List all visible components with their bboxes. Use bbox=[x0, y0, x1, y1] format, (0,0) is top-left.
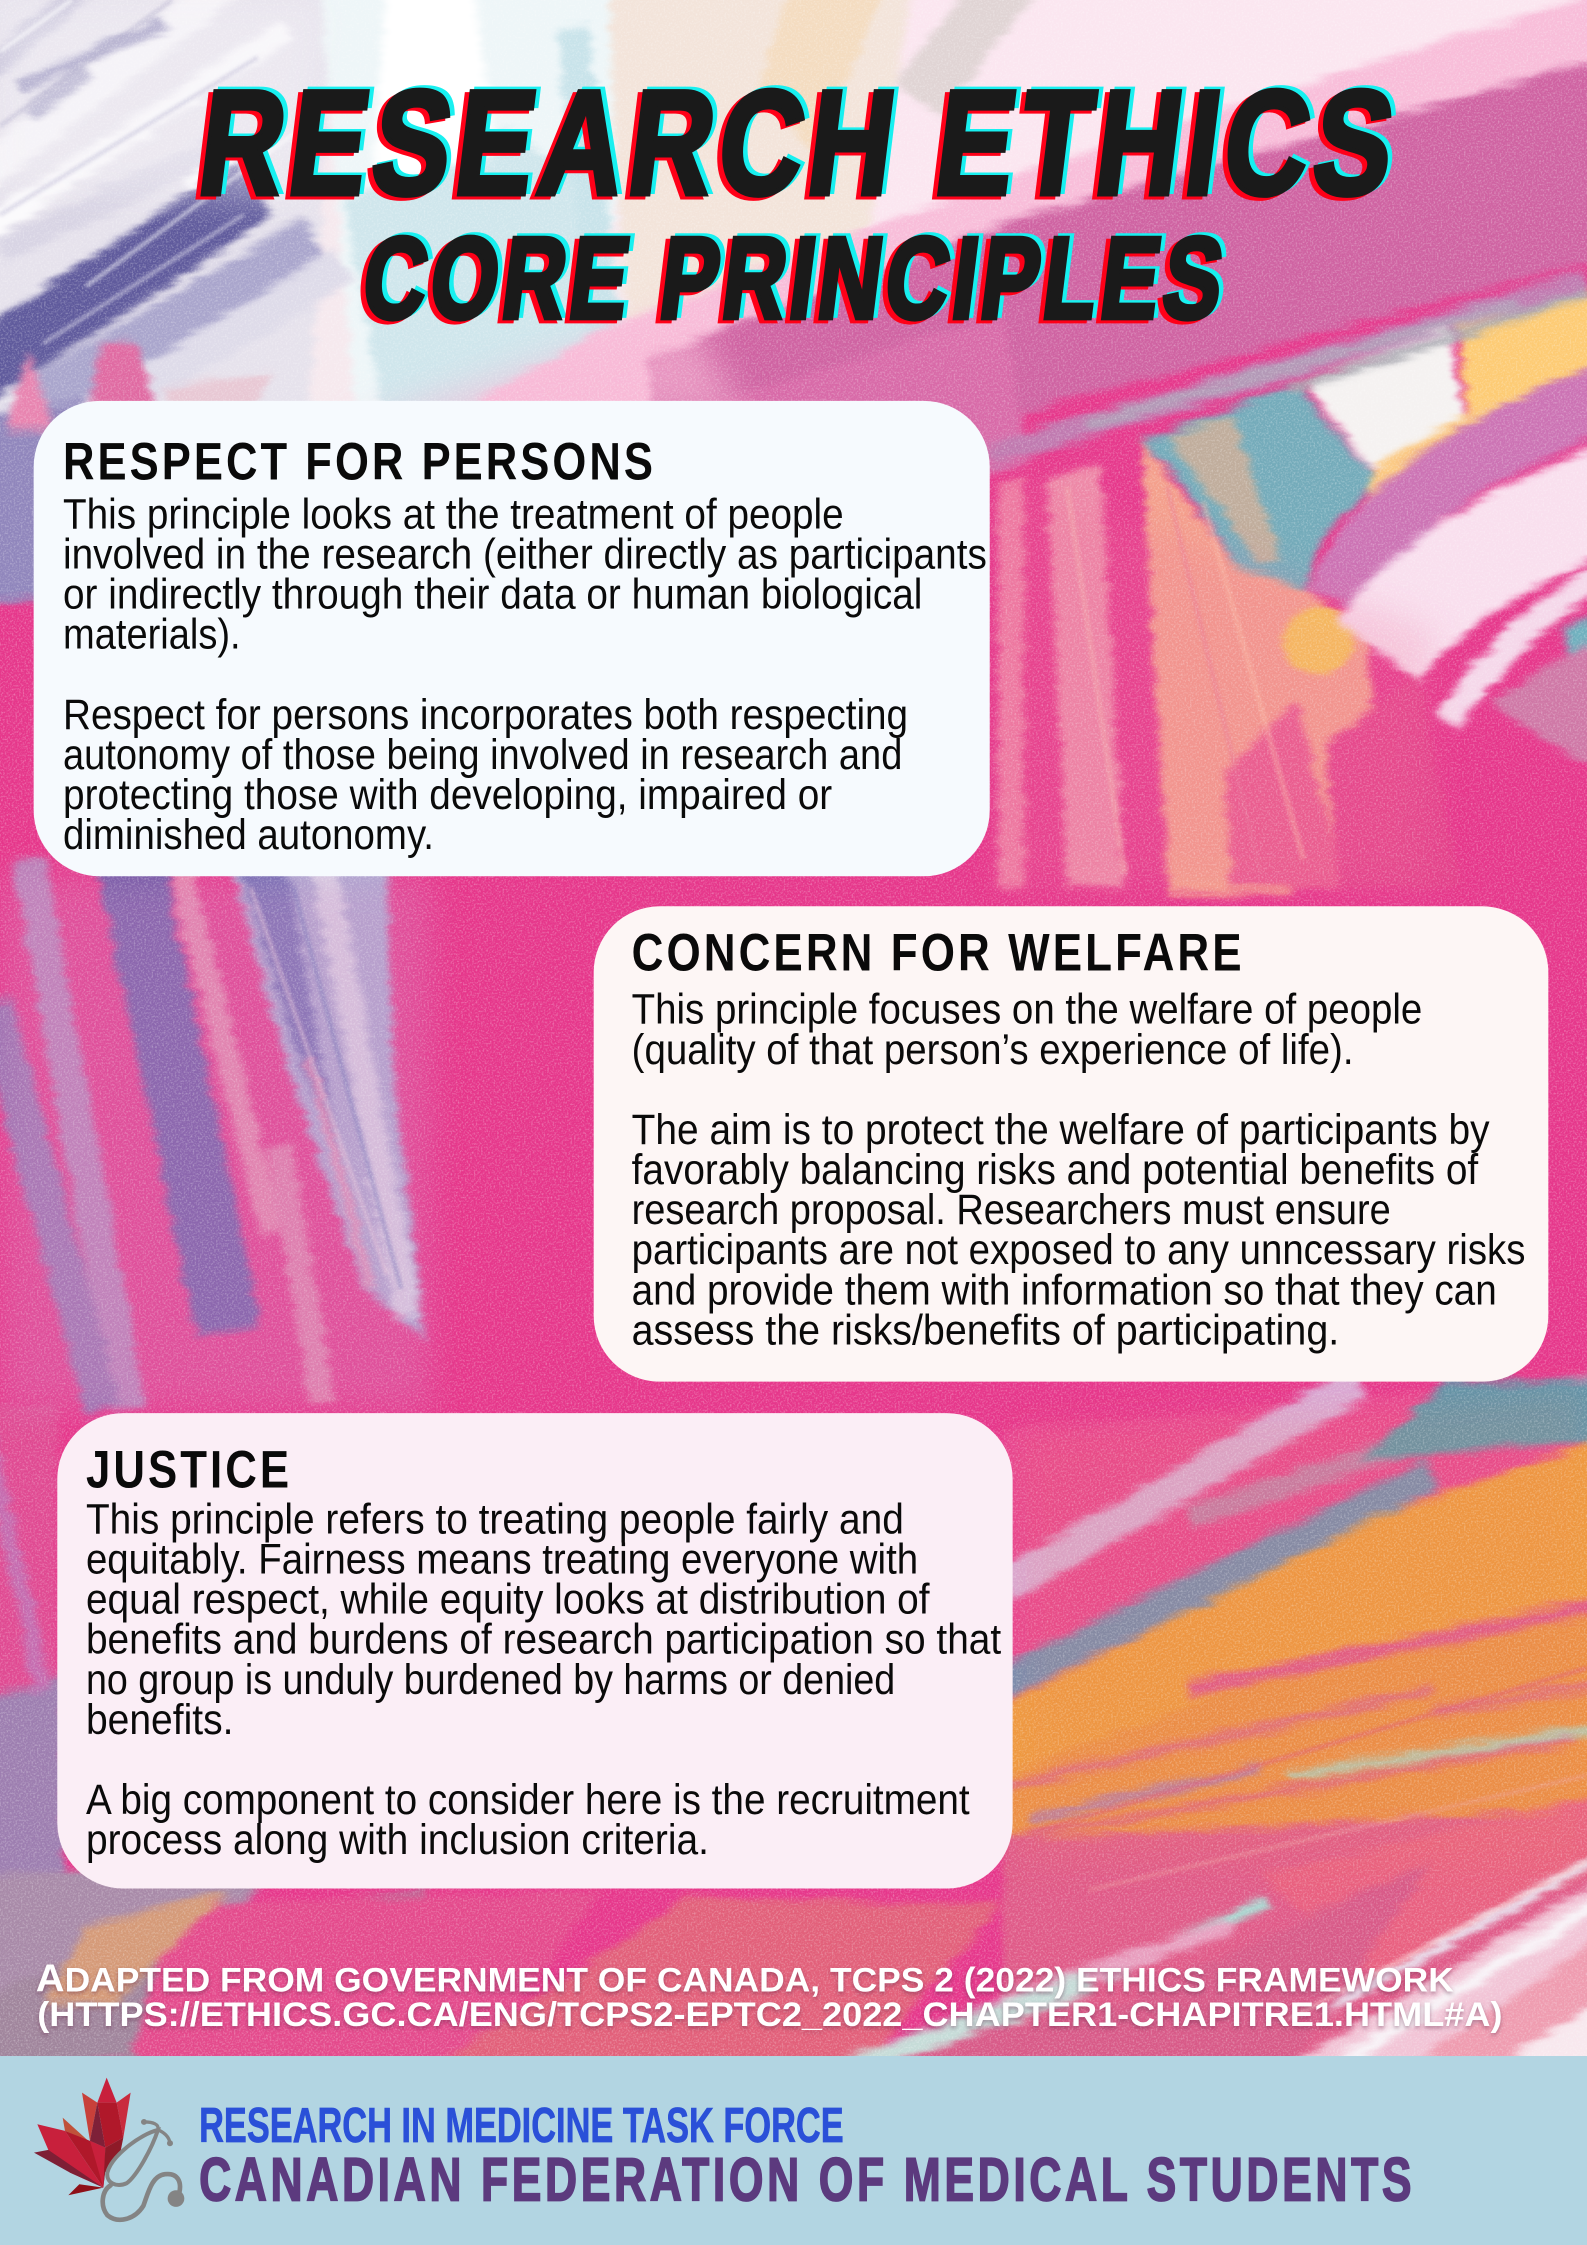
body text: justice: no group is unduly burdened by harms or denied bbox=[86, 1656, 895, 1703]
body text: concern for welfare: (quality of that person’s experience of life). bbox=[632, 1026, 1354, 1073]
title line 2: CORE PRINCIPLES bbox=[356, 213, 1235, 343]
body text: respect for persons bbox=[63, 490, 987, 858]
body text: respect for persons: involved in the research (either directly as participants bbox=[63, 530, 987, 577]
body text: respect for persons: This principle looks at the treatment of people bbox=[63, 490, 844, 537]
footer band bbox=[0, 2056, 1587, 2245]
body text: concern for welfare: assess the risks/benefits of participating. bbox=[632, 1306, 1339, 1353]
source citation: (HTTPS://ETHICS.GC.CA/ENG/TCPS2-EPTC2_2022_CHAPTER1-CHAPITRE1.HTML#A) bbox=[37, 1996, 1502, 2034]
body text: justice: benefits. bbox=[86, 1696, 233, 1743]
heading: respect for persons: RESPECT FOR PERSONS bbox=[63, 433, 656, 492]
body text: justice: This principle refers to treating people fairly and bbox=[86, 1495, 904, 1542]
footer text: task force: RESEARCH IN MEDICINE TASK FORCE bbox=[199, 2098, 844, 2153]
body text: concern for welfare: The aim is to protect the welfare of participants by bbox=[632, 1106, 1490, 1153]
body text: respect for persons: Respect for persons incorporates both respecting bbox=[63, 691, 908, 738]
body text: concern for welfare: favorably balancing risks and potential benefits of bbox=[632, 1146, 1478, 1193]
body text: respect for persons: or indirectly through their data or human biological bbox=[63, 571, 922, 617]
heading: concern for welfare: CONCERN FOR WELFARE bbox=[632, 924, 1245, 983]
body text: respect for persons: diminished autonomy. bbox=[63, 811, 434, 858]
body text: justice bbox=[86, 1495, 1001, 1863]
panel: concern for welfare bbox=[594, 906, 1548, 1382]
body text: justice: benefits and burdens of research participation so that bbox=[86, 1616, 1001, 1663]
body text: respect for persons: autonomy of those being involved in research and bbox=[63, 731, 902, 778]
body text: justice: equitably. Fairness means treating everyone with bbox=[86, 1536, 918, 1583]
body text: justice: process along with inclusion criteria. bbox=[86, 1816, 709, 1863]
logo: maple leaf and stethoscope bbox=[34, 2078, 184, 2220]
title bbox=[191, 60, 1409, 343]
panel: respect for persons bbox=[34, 401, 990, 876]
panel: justice bbox=[57, 1413, 1013, 1888]
body text: concern for welfare: This principle focuses on the welfare of people bbox=[632, 986, 1422, 1033]
body text: concern for welfare: and provide them with information so that they can bbox=[632, 1266, 1497, 1313]
body text: concern for welfare bbox=[632, 986, 1525, 1353]
body text: justice: A big component to consider here is the recruitment bbox=[86, 1776, 970, 1823]
source citation: ADAPTED FROM GOVERNMENT OF CANADA, TCPS 2 (2022) ETHICS FRAMEWORK bbox=[36, 1958, 1454, 2001]
body text: respect for persons: materials). bbox=[63, 611, 241, 658]
body text: respect for persons: protecting those with developing, impaired or bbox=[63, 771, 832, 818]
body text: justice: equal respect, while equity looks at distribution of bbox=[86, 1576, 930, 1623]
heading: justice: JUSTICE bbox=[86, 1441, 292, 1500]
body text: concern for welfare: participants are not exposed to any unncessary risks bbox=[632, 1226, 1525, 1273]
body text: concern for welfare: research proposal. Researchers must ensure bbox=[632, 1186, 1391, 1233]
source citation bbox=[36, 1958, 1502, 2034]
